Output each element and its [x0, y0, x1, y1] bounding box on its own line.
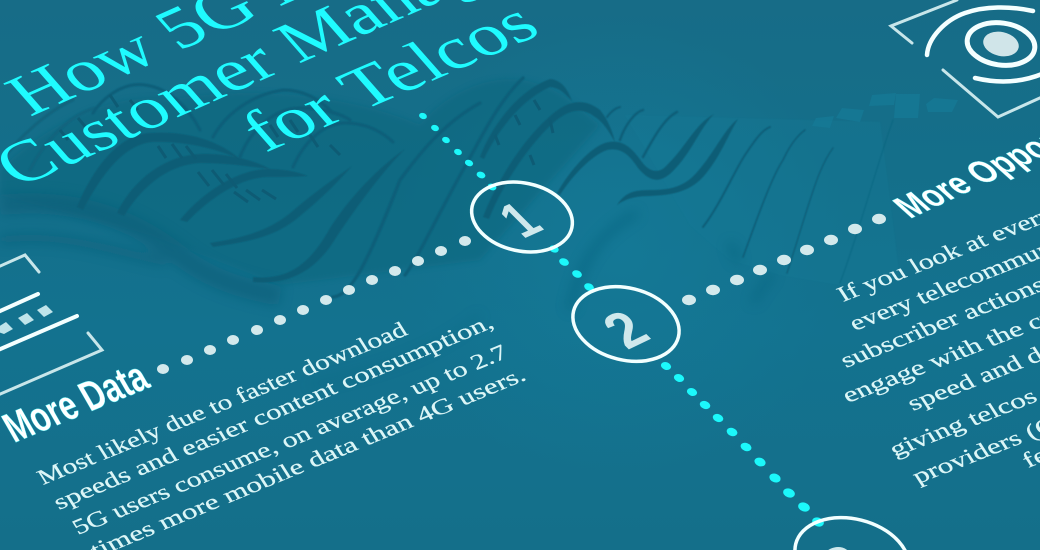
- numeral 2: 2: [590, 301, 662, 360]
- background: wave ribbons: [0, 78, 958, 385]
- background: lighter blocks: [812, 93, 958, 128]
- text block: More Data description: Most likely due to faster download: [33, 318, 412, 490]
- heading: More Data: More Data: [0, 354, 157, 452]
- numeral 1: 1: [487, 193, 554, 248]
- text block: More Data description: 5G users consume, on average, up to 2.7: [68, 340, 512, 540]
- step marker 2: [565, 276, 687, 372]
- step marker 1: [465, 173, 579, 261]
- dotted connector: right branch to More Opportunities: [682, 214, 886, 305]
- text block: More Opportunities description: [832, 202, 1040, 489]
- dotted connector: main cyan line: [418, 112, 825, 528]
- dotted connector: left branch to More Data: [157, 236, 471, 374]
- background: bold crescents: [77, 79, 738, 282]
- step marker 3: [786, 506, 918, 550]
- text block: More Data description: speeds and easier content consumption,: [49, 311, 498, 515]
- title: [0, 0, 662, 199]
- icon: eye target: [891, 0, 1040, 117]
- background: ribbon hatching: [60, 95, 553, 202]
- icon: data screen: [0, 255, 102, 395]
